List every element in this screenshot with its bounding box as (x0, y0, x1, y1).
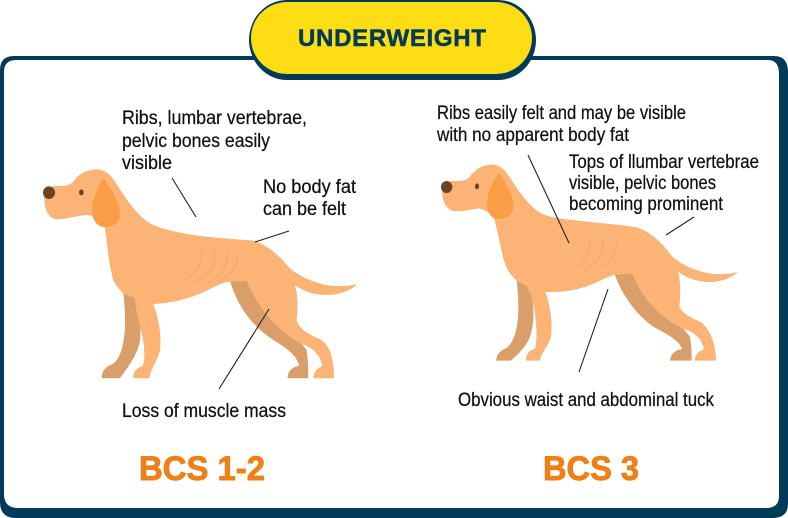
callout: no body fat: No body fat (263, 177, 357, 198)
callout: ribs easily felt: with no apparent body fat (436, 125, 630, 146)
far front leg (102, 293, 140, 378)
eye (475, 183, 479, 189)
ear (92, 178, 120, 227)
far hind leg (615, 274, 692, 361)
far hind leg (230, 281, 308, 378)
callout: no body fat: can be felt (263, 199, 347, 220)
heading: underweight pill: UNDERWEIGHT (298, 25, 486, 52)
dog illustration: BCS 3 (441, 165, 738, 361)
callout: ribs easily felt (436, 103, 686, 243)
callout: ribs, lumbar vertebrae BCS 1-2 (122, 108, 307, 217)
dog illustration: BCS 1-2 (43, 169, 357, 378)
callout: tops of lumbar vertebrae (569, 152, 759, 235)
heading: underweight pill (249, 0, 536, 80)
label: BCS 1-2: BCS 1-2 (139, 450, 265, 488)
eye (79, 189, 84, 195)
body (44, 169, 357, 378)
nose (43, 186, 55, 199)
callout: ribs, lumbar vertebrae BCS 1-2: Ribs, lumbar vertebrae, (122, 108, 307, 129)
callout: obvious waist: Obvious waist and abdominal tuck (458, 390, 714, 411)
callout: obvious waist (458, 289, 714, 411)
body (442, 165, 738, 361)
far front leg (496, 281, 533, 361)
nose (441, 181, 452, 193)
callout: ribs, lumbar vertebrae BCS 1-2: visible (122, 153, 172, 174)
callout: ribs easily felt: Ribs easily felt and may be visible (437, 103, 686, 124)
callout: loss of muscle mass (122, 309, 286, 422)
label: BCS 3: BCS 3 (543, 450, 639, 488)
callout: ribs, lumbar vertebrae BCS 1-2: pelvic bones easily (122, 131, 270, 152)
ear (487, 173, 514, 219)
ribs (570, 237, 616, 271)
callout: tops of lumbar vertebrae: Tops of llumbar vertebrae (569, 152, 759, 173)
callout: tops of lumbar vertebrae: becoming prominent (569, 194, 724, 215)
callout: loss of muscle mass: Loss of muscle mass (122, 401, 286, 422)
callout: tops of lumbar vertebrae: visible, pelvic bones (569, 173, 716, 194)
callout: no body fat (255, 177, 357, 242)
ribs (182, 247, 237, 283)
